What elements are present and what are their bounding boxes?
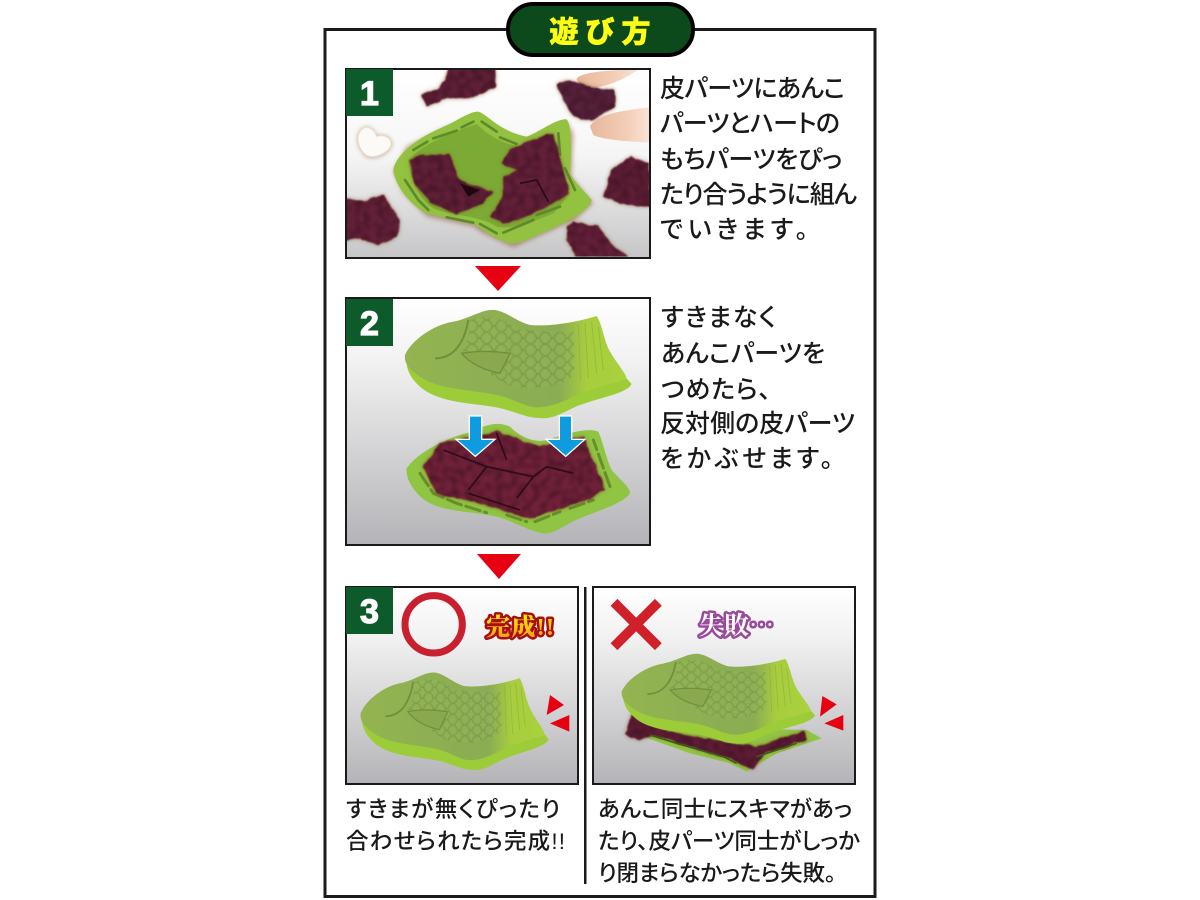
step number 3 bbox=[346, 587, 393, 634]
text: step 1 instructions: 皮パーツにあんこ bbox=[660, 75, 845, 103]
text: failure caption: り閉まらなかったら失敗。 bbox=[598, 861, 836, 886]
step number 1: 1 bbox=[360, 75, 379, 113]
text: failure caption bbox=[598, 797, 860, 886]
filling piece: right bbox=[603, 157, 652, 207]
panel 1: placing filling pieces into the skin bbox=[345, 68, 652, 258]
filling piece: left bbox=[345, 195, 400, 245]
text: step 2 instructions: 反対側の皮パーツ bbox=[660, 410, 855, 438]
text: step 2 instructions: あんこパーツを bbox=[661, 340, 825, 368]
arrow: blue left bbox=[456, 416, 495, 456]
icon: red triangles bbox=[820, 696, 843, 731]
text: step 1 instructions: たり合うように組ん bbox=[660, 181, 857, 209]
arrow: red down triangle 1 bbox=[475, 266, 521, 291]
step number 3: 3 bbox=[360, 593, 379, 631]
text: failure caption: たり、皮パーツ同士がしっか bbox=[598, 829, 860, 854]
lower tray with filling bbox=[407, 424, 630, 533]
step number 1 bbox=[346, 69, 393, 116]
text: success caption: すきまが無くぴったり bbox=[346, 797, 560, 822]
text: success caption bbox=[346, 797, 565, 854]
panel 2: covering with the other skin bbox=[346, 298, 650, 545]
filling piece: inside tray right bbox=[490, 133, 569, 224]
upper skin part bbox=[405, 310, 632, 418]
title badge: 遊び方 bbox=[508, 4, 693, 55]
arrow: blue right bbox=[546, 416, 585, 456]
filling piece: bottom right bbox=[567, 222, 630, 257]
label: 完成!!: 完成!! bbox=[486, 614, 554, 641]
divider between success and failure bbox=[584, 587, 586, 884]
fingers holding a piece bbox=[557, 69, 650, 143]
text: step 1 instructions: でいきます。 bbox=[660, 216, 808, 244]
text: step 1 instructions bbox=[660, 75, 857, 244]
outer frame bbox=[325, 30, 875, 896]
title badge: 遊び方: 遊 び 方 bbox=[550, 16, 650, 49]
arrow: red down triangle 2 bbox=[477, 554, 521, 579]
finished taiyaki bbox=[360, 672, 549, 770]
step number 2 bbox=[346, 299, 393, 346]
icon: white heart mochi bbox=[358, 127, 392, 158]
failed taiyaki with filling sticking out bbox=[622, 654, 822, 772]
text: step 2 instructions: つめたら、 bbox=[661, 376, 771, 404]
text: success caption: 合わせられたら完成!! bbox=[346, 829, 565, 854]
panel 3: success bbox=[346, 587, 578, 784]
step number 2: 2 bbox=[360, 305, 379, 343]
icon: red triangles bbox=[547, 695, 569, 732]
filling piece: top bbox=[422, 68, 497, 106]
text: step 2 instructions: すきまなく bbox=[661, 304, 776, 332]
text: step 1 instructions: パーツとハートの bbox=[660, 110, 840, 138]
text: step 2 instructions: をかぶせます。 bbox=[660, 445, 833, 473]
illustration: tray, filling pieces, heart and fingers bbox=[345, 68, 652, 257]
label: 失敗…: 失敗… bbox=[699, 606, 774, 642]
text: failure caption: あんこ同士にスキマがあっ bbox=[598, 797, 852, 822]
panel 4: failure bbox=[593, 587, 855, 784]
text: step 2 instructions bbox=[660, 304, 855, 473]
icon: red circle bbox=[405, 596, 462, 653]
icon: red cross bbox=[614, 602, 658, 647]
filling piece: inside tray left bbox=[410, 155, 493, 214]
text: step 1 instructions: もちパーツをぴっ bbox=[660, 146, 842, 174]
